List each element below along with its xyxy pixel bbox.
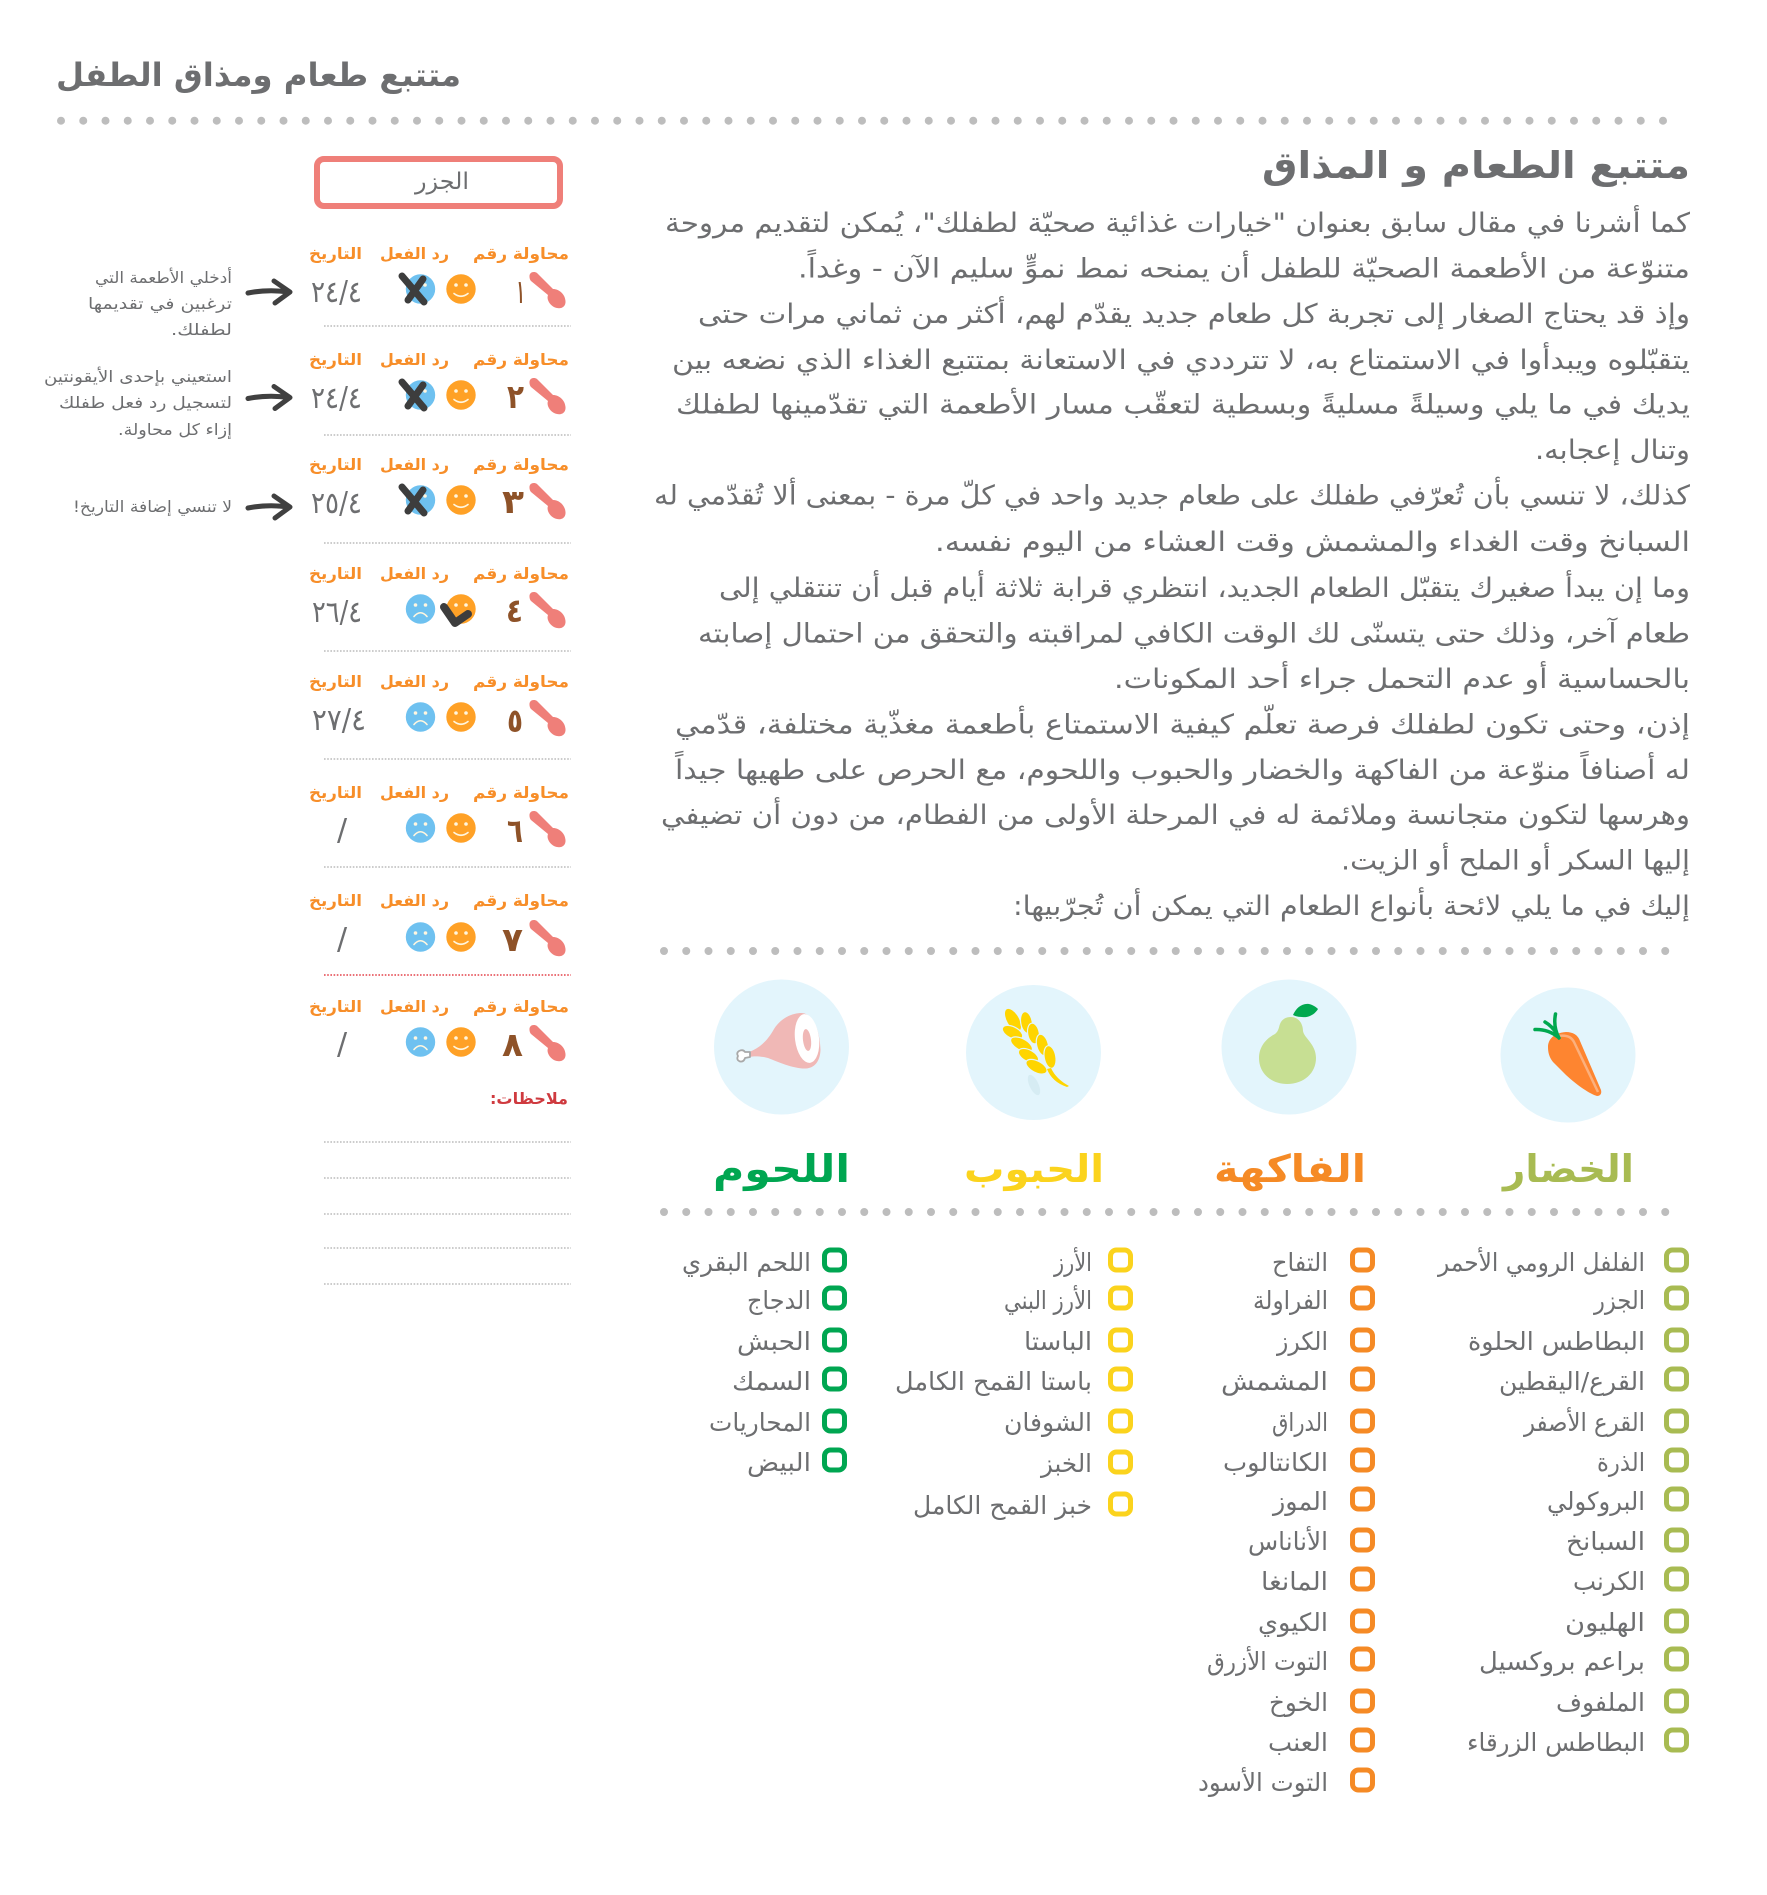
column headers: محاولة رقم [473, 564, 569, 583]
column headers: رد الفعل [380, 564, 449, 583]
list: vegetables: البروكولي [1547, 1487, 1645, 1517]
list: meat [682, 1248, 844, 1477]
side note 3: لا تنسي إضافة التاريخ! [73, 497, 232, 517]
icon: happy face [446, 702, 476, 732]
tracker row 3 [309, 455, 571, 543]
text block: article body: له أصنافاً منوّعة من الفاكهة والخضار والحبوب واللحوم، مع الحرص على طهيها جيداً [674, 750, 1690, 786]
tracker row 7 [309, 891, 571, 975]
column headers: محاولة رقم [473, 244, 569, 263]
text block: article body: كذلك، لا تنسي بأن تُعرّفي طفلك على طعام جديد واحد في كلّ مرة - بمعنى ألا تُقدّمي له [654, 475, 1690, 511]
attempt number: ٣ [502, 482, 524, 521]
icon: sad face crossed [402, 485, 435, 515]
arrow 1 [248, 281, 290, 303]
list: grains: الباستا [1024, 1327, 1092, 1356]
icon: carrot [1500, 988, 1636, 1122]
list: fruit: التوت الأسود [1198, 1766, 1328, 1797]
list: vegetables: القرع الأصفر [1522, 1406, 1645, 1437]
icon: happy face [446, 485, 476, 515]
text block: article body: يديك في ما يلي وسيلةً مسليةً وبسطية لتعقّب مسار الأطعمة التي تقدّمينها لطفلك [676, 387, 1690, 421]
column headers: محاولة رقم [473, 455, 569, 474]
list: fruit: الموز [1271, 1487, 1328, 1516]
icon: sad face crossed [402, 274, 435, 304]
attempt number: ٦ [507, 811, 523, 850]
list: vegetables: براعم بروكسيل [1479, 1647, 1645, 1677]
list: vegetables: الفلفل الرومي الأحمر [1436, 1246, 1645, 1278]
column headers: رد الفعل [380, 244, 449, 263]
icon: spoon [529, 378, 566, 414]
list: fruit: العنب [1268, 1728, 1328, 1757]
column headers: محاولة رقم [473, 350, 569, 369]
list: grains [895, 1246, 1130, 1521]
column headers: التاريخ [309, 350, 362, 369]
column headers [309, 672, 569, 691]
icon: sad face [406, 702, 435, 732]
list: meat: البيض [747, 1448, 811, 1477]
side note 1: لطفلك. [171, 320, 232, 339]
heading: vegetables: الخضار [1501, 1147, 1634, 1191]
text block: article body: إليها السكر أو الملح أو الزيت. [1341, 842, 1690, 877]
list: fruit: الكيوي [1258, 1608, 1328, 1637]
text block: article body: متنوّعة من الأطعمة الصحيّة للطفل أن يمنحه نمط نموٍّ سليم الآن - وغداً. [798, 248, 1690, 284]
list: meat: اللحم البقري [682, 1248, 811, 1278]
column headers: التاريخ [309, 564, 362, 583]
icon: spoon [529, 483, 566, 519]
text block: article body: طعام آخر، وذلك حتى يتسنّى لك الوقت الكافي لمراقبته والتحقق من احتمال إصابته [698, 618, 1690, 650]
list: vegetables: الجزر [1592, 1286, 1645, 1315]
column headers: التاريخ [309, 244, 362, 263]
list: vegetables: الذرة [1597, 1448, 1645, 1477]
list: fruit: الفراولة [1253, 1286, 1328, 1316]
list: fruit: الكرز [1275, 1327, 1328, 1356]
icon: sad face [406, 922, 435, 952]
list: meat: السمك [732, 1367, 811, 1396]
list: grains: الشوفان [1004, 1408, 1092, 1437]
column headers: رد الفعل [380, 455, 449, 474]
heading: fruit: الفاكهة [1214, 1147, 1366, 1191]
list: vegetables: السبانخ [1566, 1527, 1645, 1557]
list: fruit: التوت الأزرق [1207, 1645, 1328, 1676]
icon: wheat [966, 985, 1101, 1120]
empty date: / [337, 813, 348, 848]
list: meat: المحاريات [709, 1408, 811, 1437]
column headers [309, 350, 569, 369]
panel: tracker [309, 159, 571, 1284]
list: fruit [1198, 1248, 1372, 1797]
list: fruit: التفاح [1272, 1248, 1328, 1277]
tracker row 5 [309, 672, 571, 759]
column headers: محاولة رقم [473, 891, 569, 910]
column headers [309, 783, 569, 802]
attempt number: ٤ [506, 591, 523, 630]
attempt number: ٧ [502, 920, 523, 959]
icon: spoon [529, 1025, 566, 1061]
date: ٢٤/٤ [311, 381, 362, 416]
list: grains: باستا القمح الكامل [895, 1367, 1092, 1397]
column headers: رد الفعل [380, 672, 449, 691]
icon: happy face [446, 274, 476, 304]
column headers: محاولة رقم [473, 672, 569, 691]
text block: article body: إذن، وحتى تكون لطفلك فرصة تعلّم كيفية الاستمتاع بأطعمة مغذّية مختلفة، قدّمي [675, 703, 1690, 740]
list: grains: خبز القمح الكامل [913, 1491, 1092, 1521]
column headers [309, 564, 569, 583]
tracker row 6 [309, 783, 571, 867]
column headers: التاريخ [309, 672, 362, 691]
list: grains: الأرز البني [1004, 1284, 1092, 1315]
side note 2 [44, 366, 232, 440]
column headers: رد الفعل [380, 997, 449, 1016]
text block: article body: وإذ قد يحتاج الصغار إلى تجربة كل طعام جديد يقدّم لهم، أكثر من ثماني مرات حتى [698, 295, 1690, 330]
list: vegetables: الهليون [1565, 1608, 1645, 1638]
text block: article body: كما أشرنا في مقال سابق بعنوان "خيارات غذائية صحيّة لطفلك"، يُمكن لتقديم مروحة [665, 204, 1690, 239]
list: vegetables: البطاطس الزرقاء [1467, 1728, 1645, 1757]
date: ٢٦/٤ [312, 595, 362, 630]
list: grains: الخبز [1039, 1449, 1092, 1478]
icon: pear [1222, 980, 1356, 1114]
list: fruit: الدراق [1272, 1408, 1328, 1437]
list: meat: الحبش [737, 1327, 811, 1356]
text block: article body: وهرسها لتكون متجانسة وملائمة له في المرحلة الأولى من الفطام، من دون أن تضيفي [661, 796, 1690, 831]
side note 1: ترغبين في تقديمها [88, 294, 232, 314]
list: fruit: الأناناس [1248, 1525, 1328, 1556]
text block: article body: وما إن يبدأ صغيرك يتقبّل الطعام الجديد، انتظري قرابة ثلاثة أيام قبل أن تنتقلي إلى [719, 569, 1690, 604]
date: ٢٤/٤ [311, 275, 362, 310]
food name box [317, 159, 560, 206]
heading: grains: الحبوب [964, 1147, 1104, 1191]
icon: ham [714, 980, 849, 1114]
list: fruit: المشمش [1221, 1367, 1328, 1396]
side note 1 [88, 267, 232, 339]
list: fruit: الخوخ [1269, 1688, 1328, 1717]
icon: sad face [406, 594, 435, 624]
icon: sad face [406, 1027, 435, 1057]
empty date: / [337, 1027, 348, 1062]
column headers [309, 455, 569, 474]
list: vegetables: الكرنب [1573, 1567, 1645, 1596]
arrow 2 [248, 386, 290, 408]
column headers: محاولة رقم [473, 997, 569, 1016]
tracker row 1 [309, 244, 571, 326]
icon: spoon [529, 811, 566, 847]
list: vegetables: القرع/اليقطين [1499, 1367, 1645, 1396]
title: متتبع طعام ومذاق الطفل [56, 56, 461, 94]
tracker row 8 [309, 997, 569, 1064]
column headers: التاريخ [309, 455, 362, 474]
column headers: رد الفعل [380, 350, 449, 369]
text block: article body: إليك في ما يلي لائحة بأنواع الطعام التي يمكن أن تُجرّبيها: [1013, 886, 1690, 922]
column headers [309, 891, 569, 910]
icon: happy face [446, 813, 476, 843]
icon: happy face [446, 922, 476, 952]
icon: happy face [446, 1027, 476, 1057]
side note 2: لتسجيل رد فعل طفلك [59, 393, 232, 413]
arrow 3 [248, 496, 290, 518]
heading: article: متتبع الطعام و المذاق [1262, 144, 1690, 188]
list: fruit: المانغا [1261, 1567, 1328, 1596]
side note 2: إزاء كل محاولة. [118, 420, 232, 440]
list: meat: الدجاج [747, 1286, 811, 1316]
food name box: الجزر [414, 169, 469, 195]
empty date: / [337, 922, 348, 957]
icon: spoon [529, 700, 566, 736]
attempt number: ٥ [507, 701, 523, 740]
icon: sad face [406, 813, 435, 843]
list: vegetables: البطاطس الحلوة [1468, 1327, 1645, 1356]
notes heading: ملاحظات: [490, 1089, 568, 1108]
icon: happy face checked [444, 594, 476, 624]
text block: article body: وتنال إعجابه. [1535, 435, 1690, 466]
icon: happy face [446, 380, 476, 410]
list: vegetables [1436, 1246, 1686, 1757]
tracker row 2 [309, 350, 571, 435]
list: grains: الأرز [1052, 1246, 1092, 1277]
attempt number: ٨ [502, 1025, 523, 1064]
text block: article body: السبانخ وقت الغداء والمشمش وقت العشاء من اليوم نفسه. [935, 527, 1690, 558]
tracker row 4 [309, 564, 571, 651]
column headers: رد الفعل [380, 891, 449, 910]
column headers [309, 997, 569, 1016]
date: ٢٥/٤ [311, 486, 362, 521]
column headers: التاريخ [309, 997, 362, 1016]
icon: spoon [529, 592, 566, 628]
list: vegetables: الملفوف [1556, 1688, 1645, 1717]
text block: article body: يتقبّلوه ويبدأوا في الاستمتاع به، لا تترددي في الاستعانة بمتتبع الغذاء الذي نضعه بين [672, 341, 1690, 376]
column headers [309, 244, 569, 263]
side note 2: استعيني بإحدى الأيقونتين [44, 366, 232, 387]
text block: article body [654, 204, 1690, 922]
list: fruit: الكانتالوب [1223, 1448, 1328, 1477]
column headers: التاريخ [309, 783, 362, 802]
heading: meat: اللحوم [713, 1147, 850, 1192]
text block: article body: بالحساسية أو عدم التحمل جراء أحد المكونات. [1114, 660, 1690, 695]
column headers: رد الفعل [380, 783, 449, 802]
date: ٢٧/٤ [312, 703, 366, 738]
icon: spoon [529, 920, 566, 956]
attempt number: ٢ [507, 377, 524, 416]
icon: sad face crossed [402, 380, 435, 410]
side note 1: أدخلي الأطعمة التي [95, 267, 232, 288]
icon: spoon [529, 272, 566, 308]
column headers: محاولة رقم [473, 783, 569, 802]
tracker row 1: ١ [517, 272, 524, 311]
column headers: التاريخ [309, 891, 362, 910]
